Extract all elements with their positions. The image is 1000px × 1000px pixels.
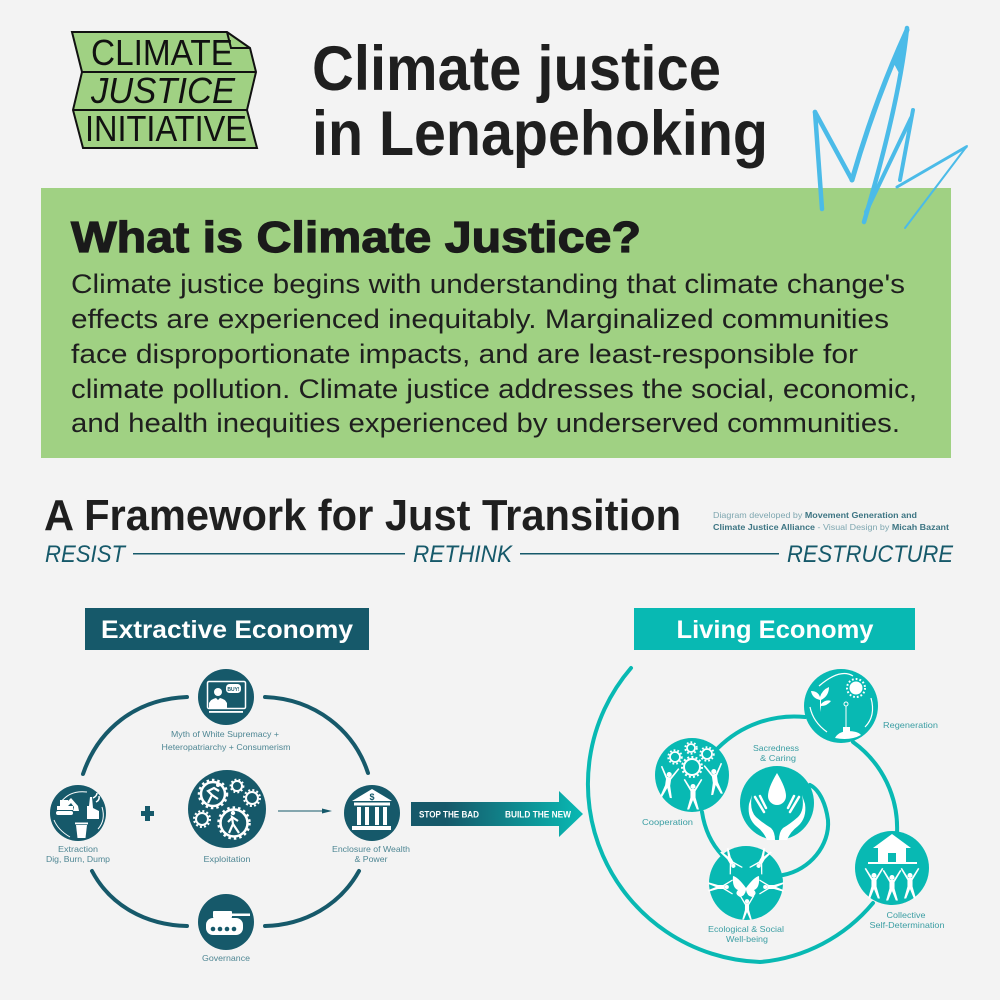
label: extraction: Dig, Burn, Dump [46, 854, 110, 864]
panel header: Extractive Economy: Extractive Economy [101, 616, 353, 644]
panel header: Living Economy: Living Economy [676, 616, 874, 644]
panel header: Living Economy [634, 608, 915, 650]
icon: myth of white supremacy: BUY! [227, 687, 240, 693]
credits: Diagram developed by Movement Generation and [713, 510, 917, 520]
body text [71, 269, 917, 438]
title [312, 34, 768, 169]
body text: Climate justice begins with understanding that climate change's [71, 269, 905, 299]
label: myth [162, 729, 290, 752]
icon: ecological and social well-being [708, 846, 784, 920]
credits: Climate Justice Alliance - Visual Design by Micah Bazant [713, 522, 949, 532]
icon: blue scribble [815, 28, 967, 228]
resist rethink restructure line: RETHINK [413, 541, 513, 568]
label: enclosure [332, 844, 410, 864]
credits [713, 510, 949, 532]
label: collective self-determination: Collective [886, 910, 926, 920]
icon: governance tank [198, 894, 254, 950]
heading: What is Climate Justice? [71, 213, 641, 262]
label: myth: Heteropatriarchy + Consumerism [162, 742, 290, 752]
arrow: stop the bad build the new: BUILD THE NEW [505, 810, 571, 820]
diagram: living economy spiral [588, 668, 897, 962]
label: ecological and social well-being: Ecological & Social [708, 924, 784, 934]
resist rethink restructure line: RESTRUCTURE [787, 541, 954, 568]
label: exploitation: Exploitation [204, 854, 251, 864]
icon: plus [141, 806, 154, 821]
icon: exploitation gears [188, 770, 266, 848]
icon: collective self-determination [855, 831, 929, 905]
arrow: stop the bad build the new [411, 791, 583, 837]
logo: Climate Justice Initiative [72, 32, 257, 149]
icon: enclosure of wealth: $ [369, 792, 375, 802]
logo: Climate Justice Initiative: INITIATIVE [85, 108, 247, 149]
title: in Lenapehoking [312, 99, 768, 169]
label: collective self-determination [870, 910, 945, 930]
label: sacredness and caring [753, 743, 799, 763]
resist rethink restructure line: RESIST [45, 541, 127, 568]
label: enclosure: Enclosure of Wealth [332, 844, 410, 854]
icon: sacredness and caring [740, 766, 814, 840]
body text: and health inequities experienced by underserved communities. [71, 408, 900, 438]
icon: cooperation [655, 738, 729, 812]
body text: effects are experienced inequitably. Marginalized communities [71, 304, 889, 334]
arrow: exploitation to enclosure [278, 808, 332, 814]
label: ecological and social well-being: Well-being [726, 934, 768, 944]
label: sacredness and caring: Sacredness [753, 743, 799, 753]
label: ecological and social well-being [708, 924, 784, 944]
icon: extraction [50, 785, 106, 841]
label: extraction [46, 844, 110, 864]
heading: A Framework for Just Transition: A Framework for Just Transition [44, 491, 681, 540]
resist rethink restructure line [45, 541, 954, 568]
label: myth: Myth of White Supremacy + [171, 729, 279, 739]
icon: regeneration [804, 669, 878, 743]
arrow: stop the bad build the new: STOP THE BAD [419, 810, 479, 820]
label: sacredness and caring: & Caring [760, 753, 796, 763]
panel: What is Climate Justice [41, 188, 951, 458]
diagram: extractive cycle ring [83, 697, 368, 926]
title: Climate justice [312, 34, 721, 104]
logo: Climate Justice Initiative: JUSTICE [90, 70, 236, 111]
label: cooperation: Cooperation [642, 817, 693, 827]
logo: Climate Justice Initiative: CLIMATE [91, 32, 233, 73]
icon: enclosure of wealth [344, 785, 400, 841]
panel header: Extractive Economy [85, 608, 369, 650]
icon: myth of white supremacy [198, 669, 254, 725]
body text: face disproportionate impacts, and are least-responsible for [71, 339, 858, 369]
label: collective self-determination: Self-Determination [870, 920, 945, 930]
label: extraction: Extraction [58, 844, 98, 854]
body text: climate pollution. Climate justice addresses the social, economic, [71, 374, 917, 404]
label: governance: Governance [202, 953, 250, 963]
label: regeneration: Regeneration [883, 720, 938, 730]
label: enclosure: & Power [354, 854, 388, 864]
